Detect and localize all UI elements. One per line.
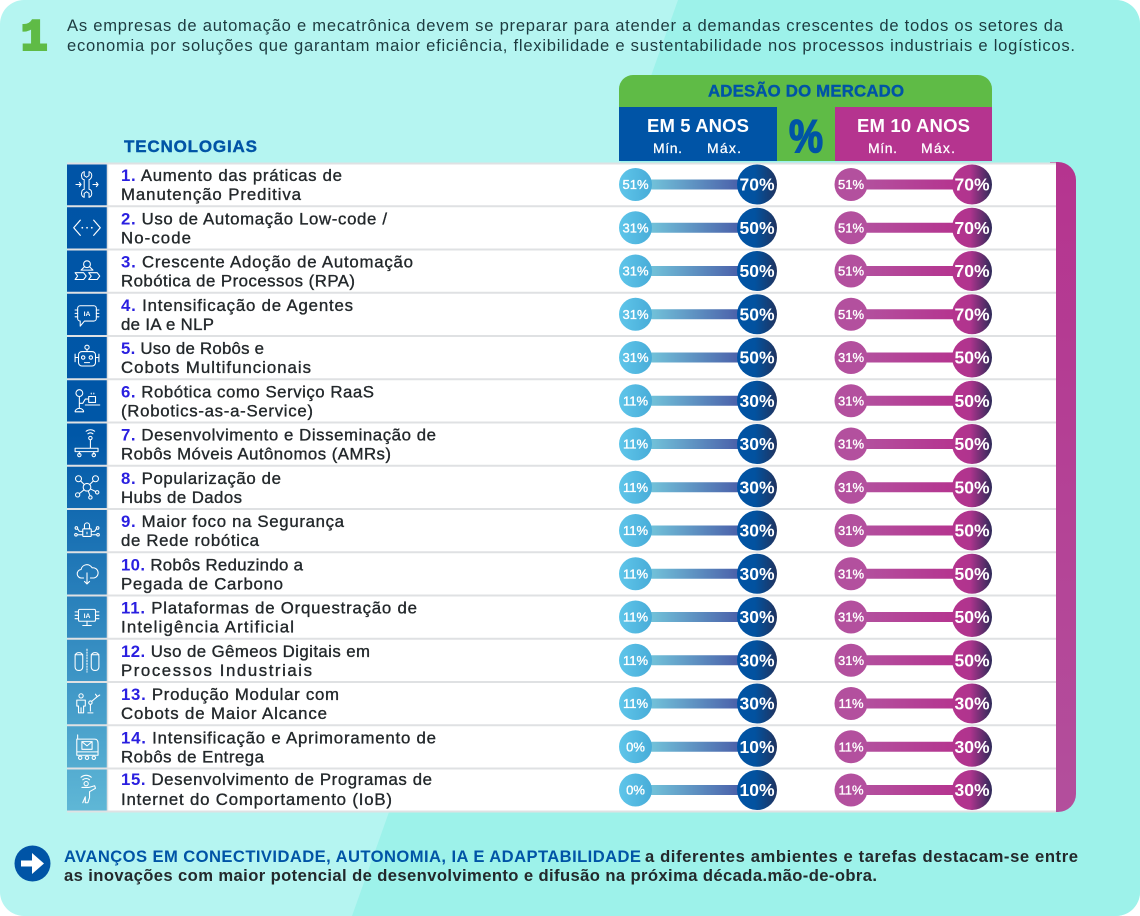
icon: AI monitor [75,609,99,626]
row 7 [75,424,992,464]
footer callout text: a diferentes ambientes e tarefas destacam-se entre [645,847,1078,866]
icon: person and cobot [77,694,100,713]
range 10 years: 11% to 30% [834,770,992,810]
label: Manutenção Preditiva [121,185,302,204]
label: Pegada de Carbono [121,574,283,593]
range 10 years: 31% to 50%: 50% [954,650,990,670]
row 10 [77,554,992,594]
row 1 [76,164,992,204]
magenta side bar [1050,162,1076,812]
icon: mobile robot with wifi [75,430,98,457]
label [121,296,353,334]
table background [107,163,1056,811]
row 13 [77,684,992,724]
range 5 years: 11% to 30% [619,684,777,724]
range 10 years: 11% to 30%: 11% [838,696,864,711]
label: Robôs de Entrega [121,747,265,766]
label: Internet do Comportamento (IoB) [121,790,392,809]
range 5 years: 11% to 30%: 11% [623,523,648,538]
range 5 years: 11% to 30%: 30% [739,650,775,670]
range 5 years: 0% to 10%: 0% [626,782,645,798]
header: 10 years: EM 10 ANOS [857,115,970,136]
range 5 years: 31% to 50% [619,208,777,248]
label [121,770,432,809]
range 5 years: 31% to 50% [619,294,777,334]
icon: footer arrow [14,846,50,882]
range 10 years: 31% to 50%: 50% [954,520,990,540]
range 5 years: 31% to 50%: 31% [622,220,649,235]
range 5 years: 11% to 30%: 30% [739,434,775,454]
range 10 years: 11% to 30%: 30% [954,780,990,800]
header: 10 years: Máx. [921,140,955,156]
range 10 years: 31% to 50%: 31% [838,480,864,495]
label [121,166,342,204]
percent symbol: % [789,110,823,162]
range 5 years: 11% to 30%: 11% [623,696,648,711]
section number: 1 [21,14,47,64]
intro text: As empresas de automação e mecatrônica devem se preparar para atender a demandas crescentes de todos os setores da [67,16,1064,35]
label: 8. Popularização de [121,469,281,488]
label: de Rede robótica [121,531,260,550]
range 10 years: 31% to 50%: 31% [838,523,864,538]
header: 10 years: Mín. [868,140,897,156]
range 5 years: 0% to 10%: 0% [626,739,645,754]
icon: AI chat bubble: IA [84,311,90,318]
range 10 years: 51% to 70%: 51% [838,264,864,278]
range 5 years: 11% to 30%: 30% [739,694,775,714]
range 5 years: 11% to 30%: 11% [623,393,648,408]
range 10 years: 11% to 30%: 11% [838,782,864,798]
range 5 years: 11% to 30% [619,640,777,680]
label: Cobots Multifuncionais [121,358,311,377]
range 5 years: 0% to 10%: 10% [739,780,775,800]
label: 4. Intensificação de Agentes [121,296,353,315]
range 10 years: 31% to 50% [834,381,992,421]
label: Inteligência Artificial [121,618,294,636]
icon: wrench with arrows [76,172,98,197]
range 5 years: 11% to 30% [619,554,777,594]
range 5 years: 11% to 30%: 11% [623,566,648,581]
label [121,512,345,550]
range 10 years: 51% to 70%: 70% [954,261,990,281]
label [121,642,370,680]
range 10 years: 51% to 70%: 70% [954,304,990,324]
label [121,426,436,464]
range 10 years: 51% to 70% [834,164,992,204]
row 5 [75,338,992,378]
icon: AI chat bubble [75,306,99,326]
range 5 years: 11% to 30%: 11% [623,480,648,495]
label: 7. Desenvolvimento e Disseminação de [121,426,436,444]
label: Robôs Móveis Autônomos (AMRs) [121,444,391,464]
range 10 years: 31% to 50% [834,640,992,680]
range 5 years: 51% to 70% [619,164,777,204]
range 5 years: 31% to 50%: 50% [739,304,775,324]
intro text: economia por soluções que garantam maior eficiência, flexibilidade e sustentabilidade nos processos industriais e logísticos. [67,36,1075,55]
range 10 years: 31% to 50% [834,554,992,594]
footer callout text: as inovações com maior potencial de desenvolvimento e difusão na próxima década.mão-de-obra. [64,866,877,885]
row 8 [76,467,992,507]
icon column [67,163,107,811]
label: 2. Uso de Automação Low-code / [121,209,387,228]
range 10 years: 31% to 50%: 50% [954,348,990,368]
range 5 years: 31% to 50% [619,251,777,291]
intro text [67,16,1075,55]
range 5 years: 11% to 30% [619,597,777,637]
header: 10 years [835,107,992,161]
range 10 years: 11% to 30%: 11% [838,739,864,754]
range 5 years: 31% to 50%: 50% [739,218,775,238]
range 5 years: 51% to 70%: 51% [622,177,649,192]
icon: digital twins [75,649,99,672]
range 10 years: 31% to 50%: 31% [838,566,864,581]
range 5 years: 31% to 50%: 31% [622,264,649,278]
label [121,598,417,636]
range 5 years: 11% to 30%: 11% [623,610,648,624]
range 10 years: 31% to 50%: 50% [954,564,990,584]
icon: process flow [75,261,100,280]
icon: data hub [76,476,99,499]
range 10 years: 31% to 50% [834,338,992,378]
range 5 years: 11% to 30%: 11% [623,653,648,668]
range 10 years: 51% to 70%: 51% [838,307,864,322]
range 10 years: 31% to 50% [834,597,992,637]
range 10 years: 11% to 30%: 30% [954,737,990,757]
range 10 years: 31% to 50%: 31% [838,436,864,452]
icon: cloud download [77,565,98,584]
range 5 years: 11% to 30%: 30% [739,391,775,411]
label [121,469,281,507]
range 10 years: 31% to 50%: 31% [838,350,864,365]
label: 9. Maior foco na Segurança [121,512,345,531]
range 10 years: 31% to 50% [834,467,992,507]
range 5 years: 11% to 30% [619,381,777,421]
panel: market adoption header [619,75,992,162]
label: 1. Aumento das práticas de [121,166,342,185]
range 5 years: 11% to 30%: 30% [739,477,775,497]
panel: technologies table [67,162,1076,812]
label: 3. Crescente Adoção de Automação [121,252,413,272]
header: 5 years: Mín. [653,140,682,156]
range 5 years: 11% to 30% [619,424,777,464]
range 10 years: 11% to 30% [834,684,992,724]
range 10 years: 31% to 50%: 31% [838,610,864,624]
label [121,339,311,377]
label: 10. Robôs Reduzindo a [121,555,304,574]
label: Hubs de Dados [121,488,242,507]
label: (Robotics-as-a-Service) [121,401,313,420]
heading: adesão do mercado: ADESÃO DO MERCADO [708,80,904,100]
row 2 [74,208,992,248]
row 4 [75,294,992,334]
icon: robot head [75,345,99,366]
range 5 years: 11% to 30%: 30% [739,564,775,584]
range 10 years: 31% to 50%: 31% [838,393,864,408]
label [121,728,436,766]
range 5 years: 0% to 10% [619,727,777,767]
label: de IA e NLP [121,315,214,334]
range 10 years: 51% to 70%: 51% [838,177,864,192]
label [121,685,339,723]
range 5 years: 11% to 30% [619,467,777,507]
range 5 years: 11% to 30%: 30% [739,520,775,540]
range 5 years: 0% to 10% [619,770,777,810]
label: No-code [121,228,191,247]
row 11 [75,597,992,637]
label: Cobots de Maior Alcance [121,704,327,723]
range 10 years: 51% to 70%: 51% [838,220,864,235]
range 10 years: 51% to 70% [834,208,992,248]
range 5 years: 31% to 50%: 31% [622,307,649,322]
range 10 years: 31% to 50%: 50% [954,477,990,497]
row 12 [75,640,992,680]
label [121,382,374,420]
label: Processos Industriais [121,661,312,680]
row 15 [81,770,992,810]
label: Robótica de Processos (RPA) [121,272,355,290]
range 10 years: 11% to 30%: 30% [954,694,990,714]
header background [619,75,992,161]
range 5 years: 0% to 10%: 10% [739,737,775,757]
icon: robot arm with box [75,390,100,412]
header: 5 years: Máx. [707,140,741,156]
icon: code brackets [74,220,100,235]
range 10 years: 31% to 50% [834,424,992,464]
range 10 years: 11% to 30% [834,727,992,767]
range 5 years: 11% to 30% [619,510,777,550]
range 10 years: 51% to 70% [834,251,992,291]
footer callout text [64,847,1078,885]
header: 5 years: EM 5 ANOS [647,115,749,136]
header: 5 years [619,107,777,161]
label [121,555,304,593]
label: 15. Desenvolvimento de Programas de [121,770,432,789]
range 10 years: 31% to 50% [834,510,992,550]
range 10 years: 51% to 70% [834,294,992,334]
label: 12. Uso de Gêmeos Digitais em [121,642,370,661]
heading: tecnologias: TECNOLOGIAS [124,137,257,156]
range 5 years: 11% to 30%: 11% [623,436,648,452]
range 10 years: 31% to 50%: 50% [954,434,990,454]
label [121,209,387,247]
footer callout text: AVANÇOS EM CONECTIVIDADE, AUTONOMIA, IA E ADAPTABILIDADE [64,847,641,866]
icon: person with wifi [81,775,96,803]
range 5 years: 51% to 70%: 70% [739,174,775,194]
row 14 [77,727,992,767]
range 5 years: 31% to 50%: 50% [739,261,775,281]
range 5 years: 31% to 50%: 31% [622,350,649,365]
label: 13. Produção Modular com [121,685,339,704]
icon: delivery robot [77,735,98,760]
range 10 years: 31% to 50%: 50% [954,607,990,627]
range 5 years: 31% to 50% [619,338,777,378]
range 5 years: 31% to 50%: 50% [739,348,775,368]
label: 5. Uso de Robôs e [121,339,264,358]
label: 11. Plataformas de Orquestração de [121,598,417,618]
label [121,252,413,290]
range 10 years: 51% to 70%: 70% [954,218,990,238]
icon: AI monitor: IA [84,613,90,620]
range 5 years: 11% to 30%: 30% [739,607,775,627]
range 10 years: 31% to 50%: 50% [954,391,990,411]
icon: network padlock [75,523,99,536]
row 3 [75,251,992,291]
row 9 [75,510,992,550]
label: 14. Intensificação e Aprimoramento de [121,728,436,747]
range 10 years: 51% to 70%: 70% [954,174,990,194]
row 6 [75,381,992,421]
range 10 years: 31% to 50%: 31% [838,653,864,668]
label: 6. Robótica como Serviço RaaS [121,382,374,401]
